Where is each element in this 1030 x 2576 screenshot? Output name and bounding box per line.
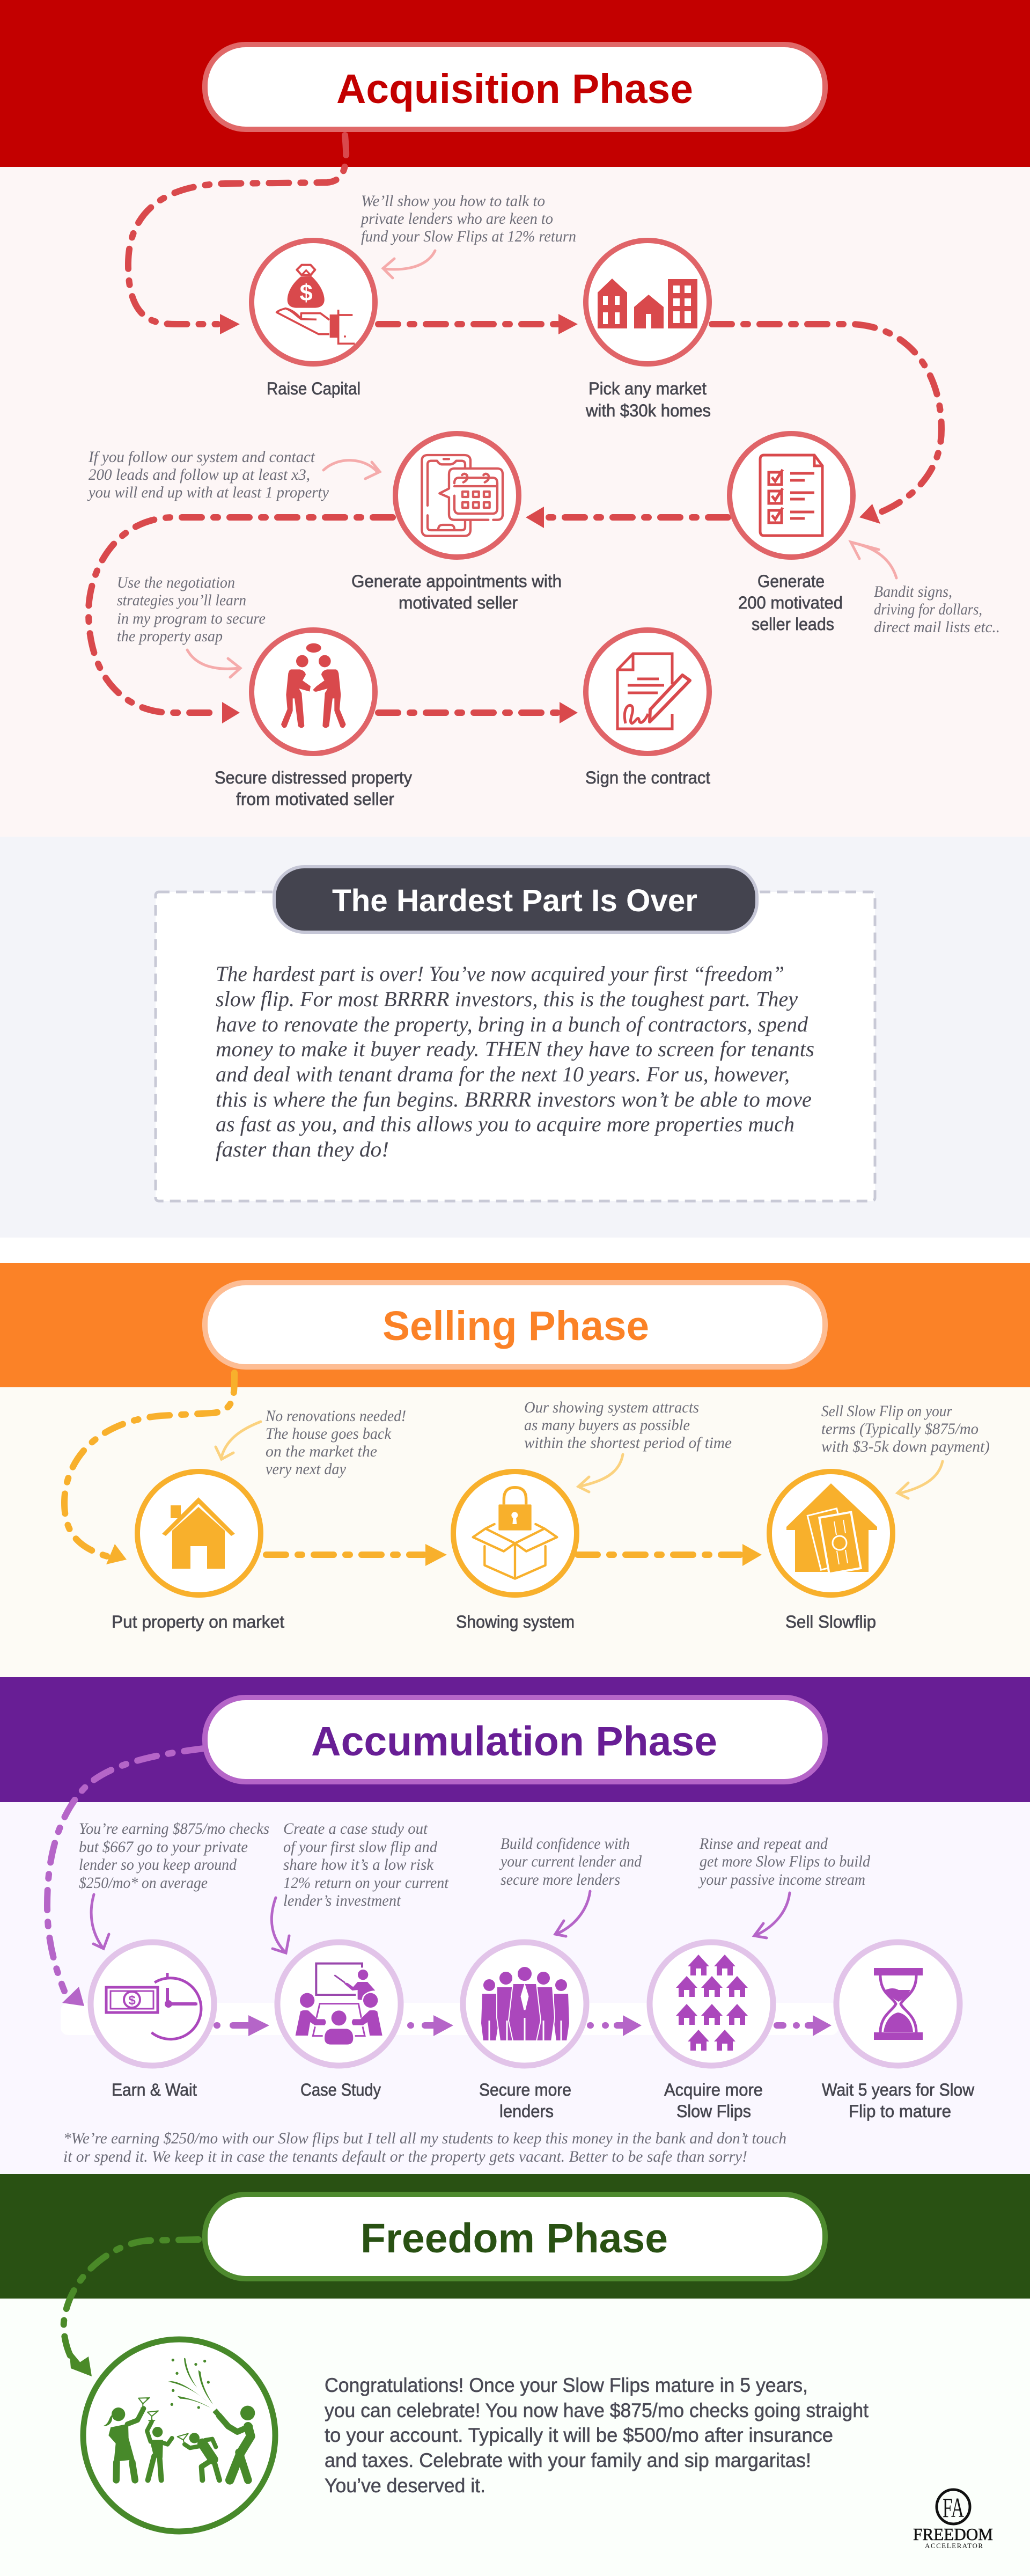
label: pick any market: with $30k homes (585, 401, 711, 420)
body text: and deal with tenant drama for the next 10 years. For us, however, (216, 1062, 790, 1086)
label: secure more lenders (479, 2080, 571, 2121)
arrow: note to generate leads (851, 542, 896, 578)
label: secure property: from motivated seller (236, 789, 394, 809)
arrow: note to secure more (555, 1891, 590, 1936)
heading pill (205, 45, 825, 129)
note: private lenders: We’ll show you how to talk to (361, 192, 545, 210)
heading pill: Accumulation Phase (311, 1718, 717, 1765)
note: earning checks: You’re earning $875/mo checks (79, 1820, 269, 1838)
label: generate leads (738, 572, 843, 634)
logo: freedom accelerator (913, 2490, 993, 2550)
label: acquire more slow flips (664, 2080, 763, 2121)
body text: The hardest part is over! You’ve now acquired your first “freedom” (216, 962, 784, 986)
note: bandit signs: driving for dollars, (874, 601, 982, 618)
section background (0, 837, 1030, 1238)
note: private lenders: fund your Slow Flips at 12% return (361, 228, 576, 245)
note: case study: Create a case study out (283, 1820, 428, 1838)
arrow: capital to market (378, 314, 578, 334)
note: no renovations: No renovations needed! (265, 1407, 406, 1425)
icon: house with money (769, 1472, 893, 1595)
icon: money bag in hand: $ (300, 281, 313, 306)
label: earn and wait: Earn & Wait (112, 2080, 197, 2099)
logo: freedom accelerator: ACCELERATOR (925, 2542, 983, 2550)
note: earning checks (79, 1820, 269, 1892)
note: follow up leads: 200 leads and follow up at least x3, (89, 466, 310, 484)
arrow: note to put on market (216, 1422, 261, 1459)
body text: have to renovate the property, bring in a bunch of contractors, spend (216, 1012, 808, 1036)
label: showing system: Showing system (456, 1612, 575, 1631)
note: case study: 12% return on your current (283, 1874, 449, 1892)
section background (0, 1802, 1030, 2174)
label: acquire more slow flips: Slow Flips (676, 2102, 751, 2121)
header band (0, 1263, 1030, 1387)
congratulations text: and taxes. Celebrate with your family and sip margaritas! (325, 2449, 811, 2471)
note: negotiation strategies (117, 574, 266, 645)
panel: freedom phase (0, 2174, 1030, 2576)
arrow: note to raise capital (383, 251, 435, 278)
note: bandit signs: Bandit signs, (874, 583, 952, 601)
arrow: note to appointments (323, 460, 380, 479)
label: put property on market: Put property on market (112, 1612, 284, 1631)
label: wait five years (822, 2080, 975, 2121)
label: generate appointments: Generate appointments with (351, 572, 562, 591)
congratulations text: You’ve deserved it. (325, 2475, 485, 2497)
heading pill: Selling Phase (382, 1303, 649, 1349)
note: private lenders: private lenders who are keen to (360, 210, 553, 228)
note: follow up leads (87, 448, 329, 501)
arrow: start to earn and wait (47, 1748, 204, 2006)
arrow: note to acquire more (754, 1893, 790, 1938)
label: sign the contract: Sign the contract (585, 768, 710, 787)
note: earning checks: $250/mo* on average (79, 1874, 208, 1892)
icon: handshake people (252, 630, 375, 753)
arrow: earn to case study (217, 2015, 269, 2036)
heading pill (205, 2194, 825, 2279)
arrow: note to sell (897, 1461, 943, 1498)
label: generate leads: Generate (757, 572, 825, 591)
icon: family celebration (83, 2339, 275, 2531)
body text: money to make it buyer ready. THEN they have to screen for tenants (216, 1037, 814, 1061)
congratulations text (325, 2374, 869, 2497)
logo: freedom accelerator: FA (943, 2493, 964, 2523)
arrow: acquire to wait (777, 2015, 832, 2036)
note: build confidence: Build confidence with (501, 1835, 630, 1853)
icon: many houses (650, 1942, 773, 2066)
note: build confidence: secure more lenders (501, 1871, 620, 1889)
label: generate leads: 200 motivated (738, 593, 843, 612)
note: no renovations: The house goes back (266, 1425, 392, 1443)
label: secure more lenders: lenders (499, 2102, 554, 2121)
section background (0, 1387, 1030, 1678)
note: negotiation strategies: strategies you’ll learn (117, 591, 246, 609)
label: pick any market: Pick any market (588, 379, 707, 398)
icon: meeting presentation (277, 1942, 401, 2066)
arrow: note to earn and wait (91, 1894, 109, 1949)
note: rinse and repeat: get more Slow Flips to build (700, 1853, 871, 1870)
note: rinse and repeat: Rinse and repeat and (699, 1835, 828, 1853)
icon: hourglass (836, 1942, 960, 2066)
label: wait five years: Flip to mature (849, 2102, 951, 2121)
section background (0, 2299, 1030, 2576)
body text: slow flip. For most BRRRR investors, this is the toughest part. They (216, 987, 798, 1011)
heading pill (205, 1697, 825, 1782)
label: sell slowflip: Sell Slowflip (785, 1612, 876, 1631)
note: showing system: within the shortest period of time (524, 1434, 732, 1452)
footnote (63, 2129, 786, 2165)
icon: money and clock (91, 1942, 214, 2066)
note: case study: share how it’s a low risk (283, 1856, 434, 1874)
heading pill (205, 1283, 825, 1367)
arrow: showing to sell (578, 1544, 762, 1566)
arrow: secure to acquire (590, 2015, 642, 2036)
arrow: secure to contract (378, 702, 578, 723)
header band (0, 2174, 1030, 2299)
note: sell on your terms (821, 1402, 990, 1455)
heading pill: The Hardest Part Is Over (332, 883, 697, 918)
label: secure more lenders: Secure more (479, 2080, 571, 2099)
dashed text card (156, 892, 875, 1201)
heading pill: Freedom Phase (360, 2215, 668, 2262)
label: raise capital: Raise Capital (267, 379, 360, 398)
congratulations text: to your account. Typically it will be $500/mo after insurance (325, 2424, 833, 2446)
congratulations text: you can celebrate! You now have $875/mo checks going straight (325, 2399, 869, 2421)
arrow: note to case study (271, 1898, 289, 1953)
arrow: note to secure property (187, 650, 240, 677)
note: earning checks: but $667 go to your private (79, 1838, 248, 1856)
label: generate appointments: motivated seller (399, 593, 518, 612)
note: showing system: as many buyers as possible (524, 1416, 690, 1434)
congratulations text: Congratulations! Once your Slow Flips mature in 5 years, (325, 2374, 808, 2396)
note: showing system (524, 1399, 732, 1452)
note: case study (283, 1820, 449, 1909)
arrow: start to put on market (64, 1373, 234, 1564)
body text: as fast as you, and this allows you to acquire more properties much (216, 1112, 794, 1136)
icon: phone with calendar (395, 434, 519, 557)
arrow: appointments to secure (89, 517, 393, 723)
note: sell on your terms: Sell Slow Flip on your (821, 1402, 952, 1420)
note: rinse and repeat (698, 1835, 871, 1889)
note: private lenders (360, 192, 576, 245)
note: negotiation strategies: the property asap (117, 627, 223, 645)
label: pick any market (585, 379, 711, 420)
arrow: start to raise capital (128, 135, 346, 334)
label: secure property: Secure distressed property (215, 768, 412, 787)
label: acquire more slow flips: Acquire more (664, 2080, 763, 2099)
label: generate leads: seller leads (752, 614, 834, 634)
panel: acquisition phase (0, 0, 1030, 837)
icon: money and clock: $ (128, 1993, 136, 2008)
arrow: start to celebration (64, 2240, 198, 2376)
header band (0, 1677, 1030, 1802)
icon: checklist (730, 434, 853, 557)
icon: houses (586, 240, 709, 364)
body text (216, 962, 814, 1161)
section background (0, 167, 1030, 837)
note: case study: lender’s investment (283, 1892, 401, 1909)
white band (61, 2003, 838, 2035)
note: build confidence: your current lender and (499, 1853, 642, 1870)
note: build confidence (499, 1835, 642, 1889)
arrow: market to leads (712, 324, 941, 524)
panel: selling phase (0, 1263, 1030, 1678)
logo: freedom accelerator: FREEDOM (913, 2524, 993, 2544)
note: earning checks: lender so you keep around (79, 1856, 237, 1874)
note: no renovations: very next day (266, 1460, 347, 1478)
footnote: *We’re earning $250/mo with our Slow flips but I tell all my students to keep this money in the bank and don’t touch (63, 2129, 786, 2147)
arrow: case study to secure (410, 2015, 453, 2036)
note: follow up leads: you will end up with at least 1 property (87, 484, 329, 501)
note: case study: of your first slow flip and (283, 1838, 438, 1856)
header band (0, 0, 1030, 167)
heading pill (274, 867, 757, 932)
arrow: market to showing (266, 1544, 447, 1566)
icon: box with lock (453, 1472, 577, 1595)
panel: accumulation phase (0, 1677, 1030, 2174)
icon: money bag in hand (252, 240, 375, 364)
note: bandit signs: direct mail lists etc.. (874, 618, 1000, 636)
note: sell on your terms: terms (Typically $875/mo (821, 1420, 979, 1438)
note: negotiation strategies: Use the negotiation (117, 574, 235, 591)
note: follow up leads: If you follow our system and contact (88, 448, 315, 466)
icon: signed contract (586, 630, 709, 753)
label: wait five years: Wait 5 years for Slow (822, 2080, 975, 2099)
note: negotiation strategies: in my program to secure (117, 610, 266, 627)
footnote: it or spend it. We keep it in case the tenants default or the property gets vacant. Better to be safe than sorry! (63, 2148, 747, 2165)
note: bandit signs (874, 583, 1000, 636)
note: showing system: Our showing system attracts (524, 1399, 699, 1416)
label: case study: Case Study (300, 2080, 381, 2099)
heading pill: Acquisition Phase (336, 66, 693, 112)
note: no renovations (265, 1407, 406, 1478)
label: generate appointments (351, 572, 562, 612)
note: rinse and repeat: your passive income stream (698, 1871, 865, 1889)
note: sell on your terms: with $3-5k down payment) (821, 1438, 990, 1455)
icon: house (137, 1472, 261, 1595)
panel: the hardest part is over (0, 837, 1030, 1238)
label: secure property (215, 768, 412, 809)
body text: faster than they do! (216, 1137, 389, 1161)
arrow: note to showing (578, 1454, 623, 1492)
body text: this is where the fun begins. BRRRR investors won’t be able to move (216, 1087, 812, 1111)
note: no renovations: on the market the (266, 1443, 377, 1460)
arrow: leads to appointments (526, 507, 728, 528)
icon: group of lenders (463, 1942, 586, 2066)
